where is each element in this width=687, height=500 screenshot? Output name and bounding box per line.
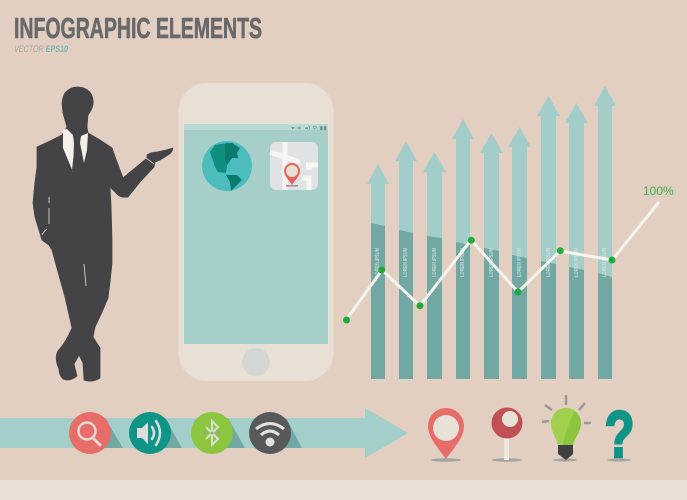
bar labels: LOREM IPSUM: [432, 248, 438, 277]
icon: wifi: [249, 412, 302, 454]
bar labels: LOREM IPSUM: [574, 248, 580, 277]
home button: [242, 348, 270, 376]
map pin: [284, 163, 300, 185]
shirt: [63, 129, 88, 172]
bar labels: [375, 248, 608, 277]
icon: bluetooth: [191, 412, 245, 454]
tie: [72, 135, 82, 175]
icon: speaker: [129, 412, 182, 454]
status bar: [184, 124, 328, 132]
status bar: ▾ ∗ ◂) ⚲ ▮▮: [291, 126, 327, 132]
bar labels: LOREM IPSUM: [460, 248, 466, 277]
map tile icon: [270, 142, 318, 190]
big horizontal arrow: [0, 408, 408, 458]
globe icon: [202, 141, 252, 191]
suit details: [42, 158, 154, 286]
bar labels: LOREM IPSUM: [517, 248, 523, 277]
icon: push pin: [492, 408, 522, 462]
bar labels: LOREM IPSUM: [489, 248, 495, 277]
smartphone: [178, 83, 334, 381]
bar labels: LOREM IPSUM: [602, 248, 608, 277]
bar labels: LOREM IPSUM: [375, 248, 381, 277]
rising arrows chart: [367, 86, 616, 379]
icon: location pin: [428, 408, 464, 462]
title: INFOGRAPHIC ELEMENTS: [14, 13, 262, 45]
icon: light bulb: [542, 395, 591, 462]
icon: question mark: ?: [604, 397, 634, 471]
data points: [343, 237, 616, 324]
bar labels: LOREM IPSUM: [403, 248, 409, 277]
icon: search: [69, 412, 123, 454]
businessman silhouette: [33, 87, 173, 381]
dark bar bases: [371, 223, 612, 379]
screen: [184, 124, 328, 344]
bar labels: LOREM IPSUM: [546, 248, 552, 277]
trend line: [343, 202, 659, 324]
subtitle: VECTOR EPS10: [14, 44, 68, 54]
100% label: 100%: [643, 184, 674, 198]
